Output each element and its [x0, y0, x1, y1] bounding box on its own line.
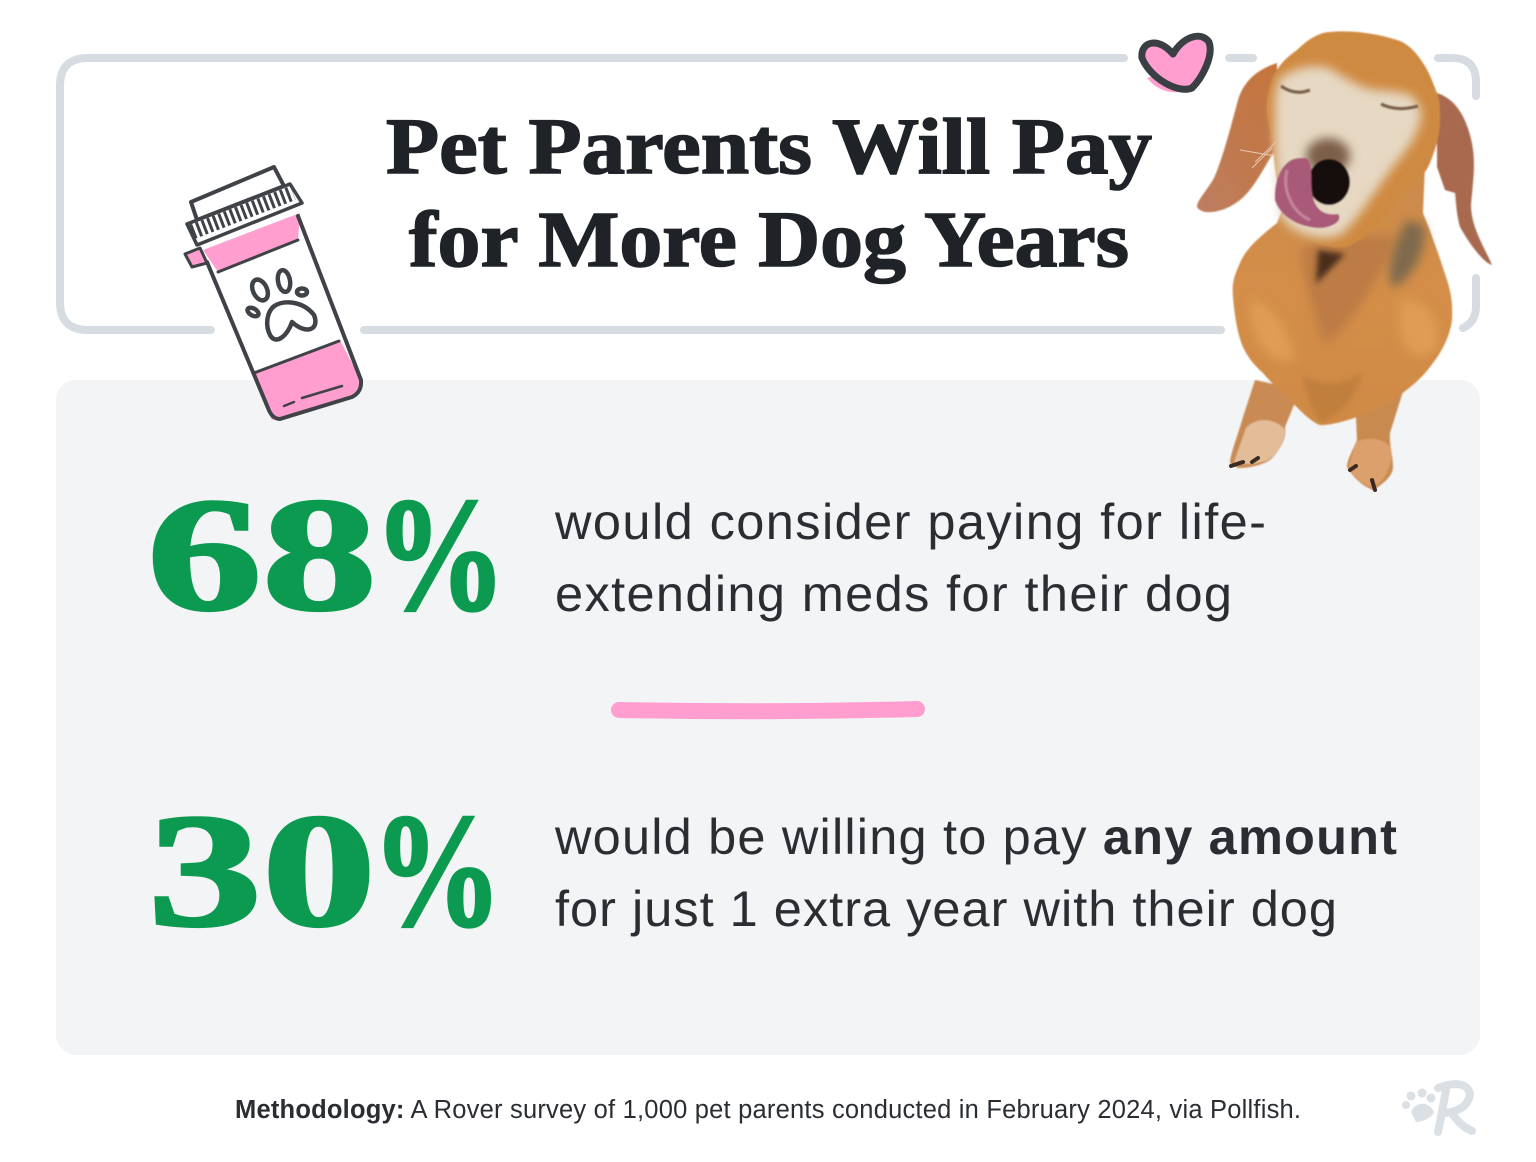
- description 30%: for just 1 extra year with their dog: [555, 880, 1337, 937]
- dog left paw light: [1234, 420, 1285, 464]
- paw print: [246, 269, 315, 340]
- rover logo: [1402, 1084, 1472, 1132]
- dog whiskers: [1240, 142, 1276, 168]
- number 68%: %: [374, 466, 506, 645]
- dog head: [1266, 31, 1440, 247]
- dog closed eyes: [1281, 86, 1310, 92]
- dog body: [1233, 150, 1452, 425]
- number 30%: [148, 782, 502, 961]
- methodology footnote: Methodology: A Rover survey of 1,000 pet parents conducted in February 2024, via Pollfish.: [235, 1096, 1301, 1124]
- description 68%: would consider paying for life-: [554, 493, 1266, 550]
- pink divider: [619, 709, 917, 711]
- description 68%: extending meds for their dog: [555, 565, 1232, 622]
- icon: pill bottle: [185, 167, 362, 420]
- dog left ear: [1197, 63, 1277, 212]
- dog right paw: [1349, 439, 1391, 488]
- stat: 68%: [147, 466, 1266, 645]
- icon: heart: [1142, 36, 1210, 92]
- description 68%: [554, 493, 1266, 622]
- dog legs: [1230, 380, 1300, 468]
- title: [386, 104, 1152, 284]
- dog face white: [1275, 66, 1421, 238]
- description 30%: would be willing to pay any amount: [554, 808, 1397, 865]
- title frame: [60, 58, 1476, 330]
- number 30%: 30: [148, 782, 376, 961]
- dog nose: [1308, 159, 1350, 205]
- stat: 30%: [148, 782, 1397, 961]
- dog tongue: [1275, 158, 1339, 228]
- bottle pink band bottom: [253, 340, 362, 420]
- title: for More Dog Years: [409, 197, 1129, 284]
- dog claws: [1231, 458, 1375, 490]
- dog chest shading: [1303, 372, 1362, 423]
- description 30%: [554, 808, 1397, 937]
- dog muzzle dark: [1306, 138, 1350, 174]
- number 30%: %: [372, 782, 502, 961]
- bottle pink band top: [203, 213, 300, 272]
- bottle cap: [191, 167, 284, 220]
- number 68%: [147, 466, 506, 645]
- number 68%: 68: [147, 466, 377, 645]
- dog photo: [1197, 31, 1492, 490]
- stats panel: [56, 380, 1480, 1055]
- dog right ear: [1437, 93, 1492, 265]
- title: Pet Parents Will Pay: [386, 104, 1152, 191]
